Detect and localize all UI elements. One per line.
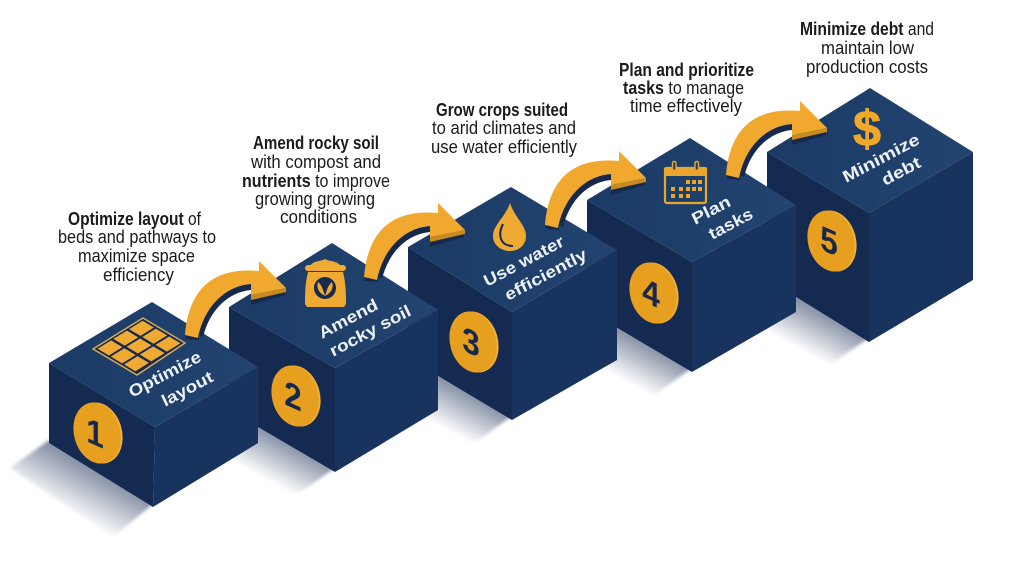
caption: step 1: maximize space xyxy=(78,246,195,266)
caption: step 2: Amend rocky soil xyxy=(253,133,379,153)
caption: step 4: time effectively xyxy=(630,96,742,116)
ground shadow: cube 1 xyxy=(10,440,153,537)
caption: step 2 xyxy=(242,133,390,227)
caption: step 2: growing growing xyxy=(255,189,375,209)
cube 2 xyxy=(229,243,438,472)
cube 5 label: debt xyxy=(879,153,924,190)
cube 3 label: efficiently xyxy=(502,244,590,305)
number coin 2 xyxy=(265,360,327,432)
cube 3 xyxy=(408,187,617,420)
cube 5 label: Minimize xyxy=(840,130,923,187)
caption: step 5: production costs xyxy=(806,57,928,77)
number coin 1 xyxy=(67,397,129,469)
caption: step 1: efficiency xyxy=(103,265,174,285)
number coin 4 xyxy=(623,257,685,329)
caption: step 3 xyxy=(431,100,577,157)
caption: step 5 xyxy=(800,19,934,77)
number coin 4: 4 xyxy=(642,271,660,317)
cube 3 label: Use water xyxy=(481,232,567,291)
caption: step 1 xyxy=(58,209,216,285)
icon: water drop xyxy=(493,203,526,251)
number coin 3 xyxy=(443,306,505,378)
cube 3 label xyxy=(481,232,590,305)
arrow 3 to 4 xyxy=(545,151,646,230)
cube 5 xyxy=(767,88,973,342)
cube 1 label xyxy=(126,347,216,411)
icon: sack xyxy=(305,259,346,307)
caption: step 1: Optimize layout of xyxy=(68,209,202,229)
cube 2 label: Amend xyxy=(316,295,381,343)
caption: step 2: with compost and xyxy=(250,152,381,172)
caption: step 1: beds and pathways to xyxy=(58,227,216,247)
ground shadow: cube 4 xyxy=(553,306,692,398)
ground shadow: cube 2 xyxy=(195,406,335,498)
arrow 4 to 5 xyxy=(726,101,827,180)
caption: step 3: to arid climates and xyxy=(432,118,576,138)
number coin 5 xyxy=(801,205,863,277)
caption: step 2: conditions xyxy=(280,207,357,227)
icon: garden grid xyxy=(93,318,185,375)
number coin 3: 3 xyxy=(462,320,480,366)
cube 1 label: layout xyxy=(159,367,216,411)
cube 4 label: Plan xyxy=(689,192,734,229)
caption: step 3: use water efficiently xyxy=(431,137,577,157)
caption: step 2: nutrients to improve xyxy=(242,171,390,191)
arrow 1 to 2 xyxy=(185,261,286,340)
cube 1 label: Optimize xyxy=(126,347,204,402)
cube 2 label xyxy=(316,295,414,361)
caption: step 4 xyxy=(619,60,754,116)
arrow 2 to 3 xyxy=(364,203,465,282)
caption: step 4: tasks to manage xyxy=(623,78,744,98)
cube 4 label: tasks xyxy=(706,204,756,244)
caption: step 3: Grow crops suited xyxy=(436,100,568,120)
icon: dollar sign: $ xyxy=(853,101,881,157)
cube 4 label xyxy=(689,192,756,244)
number coin 1: 1 xyxy=(86,411,104,457)
number coin 5: 5 xyxy=(820,219,838,265)
number coin 2: 2 xyxy=(284,374,302,420)
icon: calendar xyxy=(664,162,707,203)
ground shadow: cube 5 xyxy=(735,275,869,368)
cube 4 xyxy=(587,138,796,372)
caption: step 5: maintain low xyxy=(821,38,915,58)
caption: step 4: Plan and prioritize xyxy=(619,60,754,80)
ground shadow: cube 3 xyxy=(373,354,512,446)
caption: step 5: Minimize debt and xyxy=(800,19,934,39)
cube 2 label: rocky soil xyxy=(327,301,414,361)
cube 1 xyxy=(49,302,258,507)
